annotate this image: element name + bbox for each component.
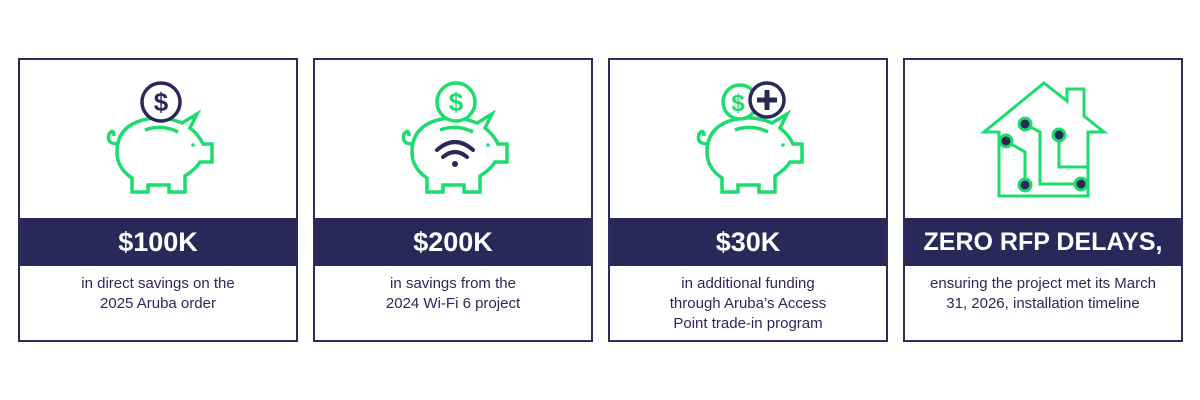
- text: in additional funding: [681, 275, 815, 292]
- headline: [610, 218, 886, 266]
- text: ensuring the project met its March: [930, 275, 1156, 292]
- text: 31, 2026, installation timeline: [946, 295, 1140, 312]
- icon: piggy bank wifi: [402, 81, 509, 194]
- panel: $100K: [18, 58, 298, 342]
- icon: piggy bank plus coin: $: [731, 90, 745, 117]
- headline: $100K: [118, 227, 198, 257]
- text: [386, 275, 520, 312]
- headline: [315, 218, 591, 266]
- text: [930, 275, 1156, 312]
- text: [81, 275, 235, 312]
- text: 2025 Aruba order: [100, 295, 216, 312]
- panel: $30K: [608, 58, 888, 342]
- text: [670, 275, 826, 332]
- headline: [905, 218, 1181, 266]
- icon: piggy bank with coin: $: [154, 87, 169, 117]
- icon: piggy bank wifi: $: [449, 87, 464, 117]
- headline: $30K: [716, 227, 780, 257]
- icon: circuit house: [980, 81, 1108, 198]
- text: Point trade-in program: [673, 315, 823, 332]
- panel: $200K: [313, 58, 593, 342]
- icon: piggy bank plus coin: [696, 81, 804, 194]
- icon: piggy bank with coin: [106, 81, 214, 194]
- text: in direct savings on the: [81, 275, 235, 292]
- headline: $200K: [413, 227, 493, 257]
- headline: ZERO RFP DELAYS,: [924, 228, 1162, 256]
- text: through Aruba’s Access: [670, 295, 826, 312]
- text: 2024 Wi-Fi 6 project: [386, 295, 520, 312]
- headline: [20, 218, 296, 266]
- panel: zero RFP delays: [903, 58, 1183, 342]
- text: in savings from the: [390, 275, 516, 292]
